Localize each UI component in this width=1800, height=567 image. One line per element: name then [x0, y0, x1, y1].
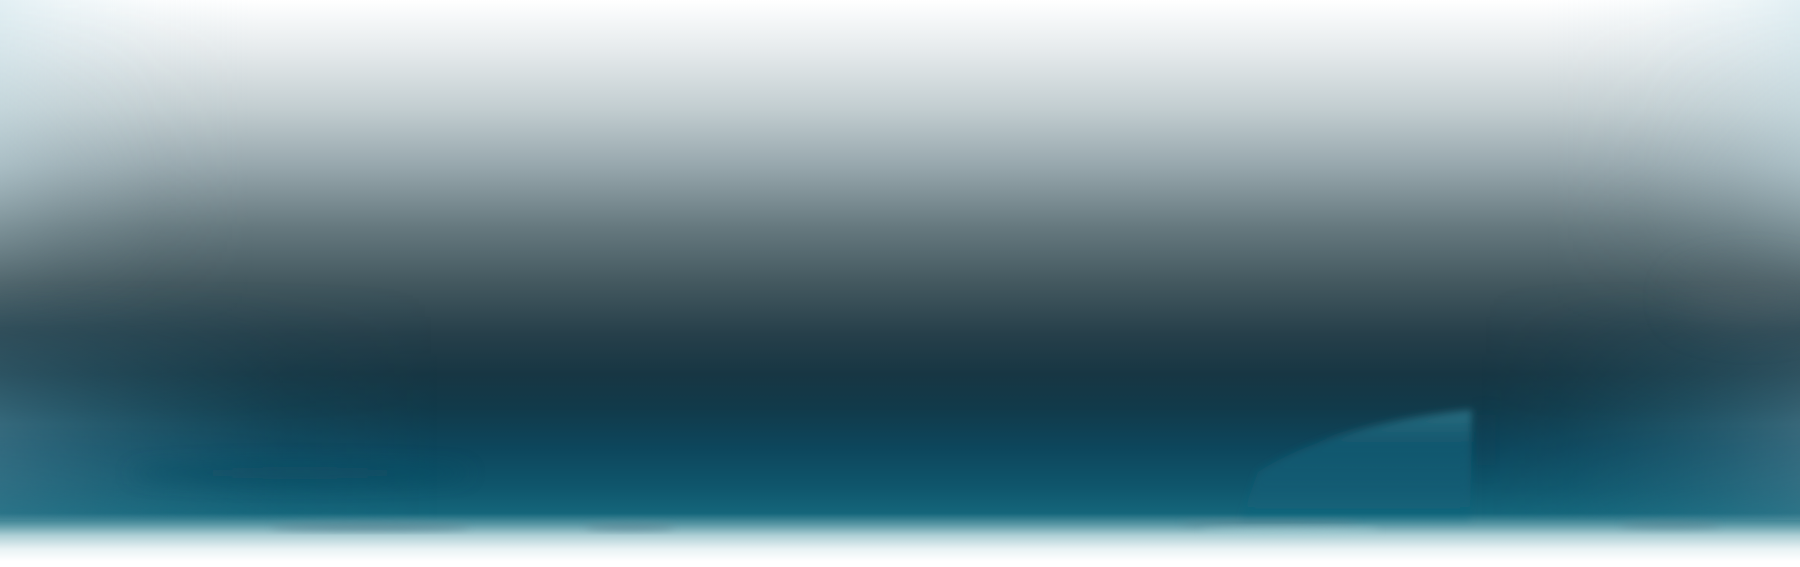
- left lower teal glow: [0, 312, 266, 520]
- right grey haze patch: [1680, 276, 1800, 320]
- fin shape on the water: [1240, 410, 1472, 522]
- dark band in left water: [130, 465, 470, 481]
- dark shoreline smudges: [270, 520, 1720, 530]
- right lower teal glow: [1588, 318, 1800, 520]
- right upper haze: [1669, 0, 1800, 300]
- pale foam on shoreline: [1200, 527, 1380, 535]
- dark shadow right of fin: [1476, 415, 1496, 465]
- left upper haze: [0, 0, 128, 304]
